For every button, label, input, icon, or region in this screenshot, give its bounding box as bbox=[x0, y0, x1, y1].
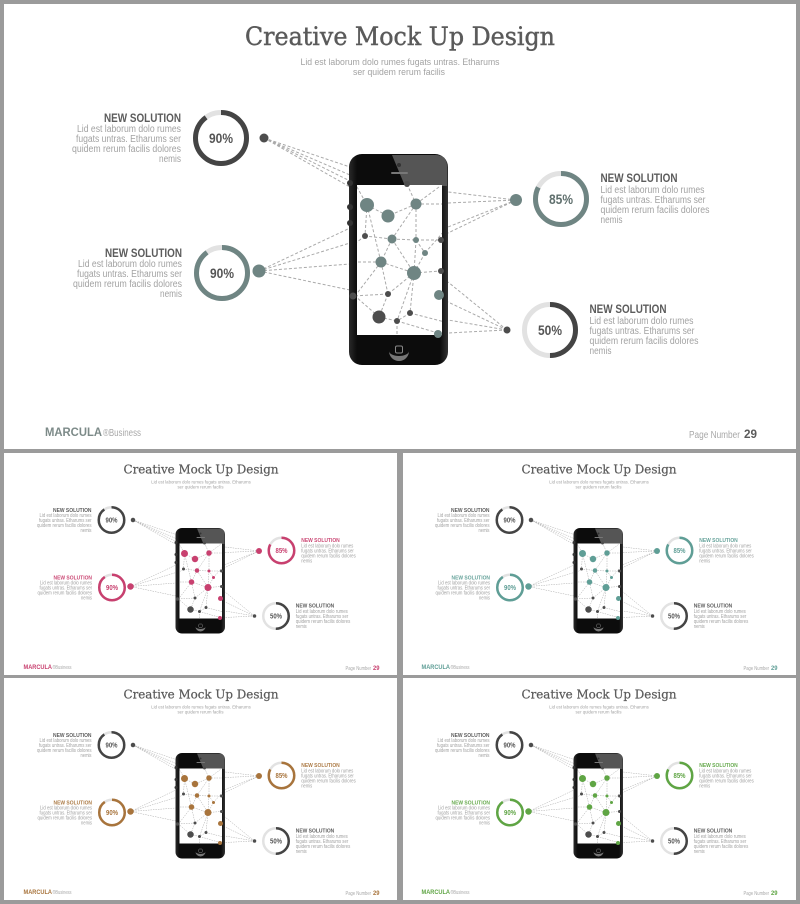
callout: lower right: nemis bbox=[296, 624, 307, 630]
nodes: network bbox=[174, 766, 223, 845]
panel: main slide bbox=[45, 22, 757, 441]
callout: lower left: NEW SOLUTION bbox=[452, 576, 490, 582]
panel: brown slide bbox=[24, 686, 380, 897]
callout: lower right: NEW SOLUTION bbox=[296, 604, 334, 610]
callout: lower left: Lid est laborum dolo rumes bbox=[40, 580, 92, 586]
brand footer bbox=[24, 664, 72, 671]
callout: lower right: quidem rerum facilis dolores bbox=[694, 844, 749, 850]
callout: lower left: Lid est laborum dolo rumes bbox=[438, 806, 490, 812]
callout: top right: Lid est laborum dolo rumes bbox=[600, 185, 704, 196]
callout: lower left: nemis bbox=[160, 289, 182, 300]
callout: top left: Lid est laborum dolo rumes bbox=[438, 738, 490, 744]
callout: top left: NEW SOLUTION bbox=[451, 508, 490, 514]
brand footer: MARCULA bbox=[24, 665, 53, 671]
brand footer: MARCULA bbox=[24, 890, 53, 896]
callout: top left: 90% bbox=[106, 742, 118, 750]
title: Creative Mock Up Design bbox=[124, 462, 278, 476]
callout: top left: fugats untras. Etharums ser bbox=[437, 743, 490, 749]
callout: top right: quidem rerum facilis dolores bbox=[301, 554, 356, 560]
callout: top left bbox=[435, 507, 533, 534]
callout: lower right: quidem rerum facilis dolores bbox=[694, 619, 749, 625]
callout: top right: 85% bbox=[276, 548, 288, 555]
callout: lower right: fugats untras. Etharums ser bbox=[694, 839, 747, 845]
callout: top left: nemis bbox=[80, 753, 92, 759]
brand footer: ®Business bbox=[450, 889, 470, 896]
callout: top right: NEW SOLUTION bbox=[301, 763, 340, 769]
connector lines bbox=[528, 520, 657, 618]
page number: 29 bbox=[373, 666, 380, 672]
callout: lower right: quidem rerum facilis dolores bbox=[296, 619, 351, 625]
callout: top right: NEW SOLUTION bbox=[301, 538, 340, 544]
callout: lower right: quidem rerum facilis dolores bbox=[296, 844, 351, 850]
callout: top right: nemis bbox=[301, 784, 313, 790]
brand footer bbox=[24, 889, 72, 896]
callout: top left: Lid est laborum dolo rumes bbox=[438, 513, 490, 519]
callout: top left: Lid est laborum dolo rumes bbox=[40, 738, 92, 744]
page number: Page Number bbox=[689, 430, 741, 441]
callout: lower right bbox=[253, 603, 351, 630]
callout: lower right: 50% bbox=[668, 838, 681, 846]
callout: top left: fugats untras. Etharums ser bbox=[76, 134, 182, 145]
callout: lower right: 50% bbox=[270, 614, 283, 620]
callout: lower right: Lid est laborum dolo rumes bbox=[296, 834, 348, 840]
callout: top right: nemis bbox=[301, 558, 313, 564]
callout: lower right: fugats untras. Etharums ser bbox=[590, 326, 695, 337]
callout: top left bbox=[37, 732, 135, 759]
brand footer bbox=[422, 664, 470, 671]
callout: top left: Lid est laborum dolo rumes bbox=[40, 513, 92, 519]
callout: lower left bbox=[436, 575, 532, 602]
brand footer bbox=[422, 889, 470, 896]
page number: 29 bbox=[771, 666, 778, 672]
callout: top right: fugats untras. Etharums ser bbox=[301, 548, 354, 554]
callout: top left: 90% bbox=[209, 130, 233, 146]
callout: top right: NEW SOLUTION bbox=[699, 763, 738, 769]
subtitle bbox=[549, 704, 649, 716]
callout: top right bbox=[654, 763, 754, 790]
icon: phone bbox=[174, 528, 225, 634]
callout: lower left: quidem rerum facilis dolores bbox=[73, 279, 182, 290]
callout: top right: fugats untras. Etharums ser bbox=[699, 548, 752, 554]
callout: top right bbox=[256, 538, 356, 564]
callout: lower left bbox=[436, 800, 532, 826]
callout: lower left bbox=[38, 575, 134, 602]
callout: lower right: 50% bbox=[538, 322, 562, 338]
callout: lower right: NEW SOLUTION bbox=[694, 604, 732, 610]
callout: lower right bbox=[504, 304, 698, 357]
subtitle: ser quidem rerum facilis bbox=[178, 710, 224, 716]
callout: top left: fugats untras. Etharums ser bbox=[437, 518, 490, 524]
subtitle: Lid est laborum dolo rumes fugats untras. Etharums bbox=[151, 704, 251, 710]
panel: pink slide bbox=[24, 462, 380, 672]
callout: lower right: Lid est laborum dolo rumes bbox=[590, 316, 694, 327]
title: Creative Mock Up Design bbox=[124, 686, 278, 702]
callout: top left: nemis bbox=[159, 154, 181, 165]
callout: lower left: fugats untras. Etharums ser bbox=[40, 810, 92, 816]
callout: top right: fugats untras. Etharums ser bbox=[600, 195, 706, 206]
callout: lower left: fugats untras. Etharums ser bbox=[438, 586, 490, 592]
callout: lower right: Lid est laborum dolo rumes bbox=[296, 609, 348, 615]
connector lines bbox=[130, 745, 259, 842]
callout: top left bbox=[37, 507, 135, 534]
callout: top right: Lid est laborum dolo rumes bbox=[699, 544, 752, 550]
callout: top left: nemis bbox=[80, 528, 92, 534]
callout: lower left: nemis bbox=[81, 596, 92, 602]
page number: Page Number bbox=[744, 666, 769, 672]
subtitle bbox=[151, 480, 251, 490]
callout: top right: quidem rerum facilis dolores bbox=[699, 554, 754, 560]
connector lines bbox=[528, 745, 657, 842]
callout: lower left: 90% bbox=[106, 810, 119, 817]
subtitle: Lid est laborum dolo rumes fugats untras. Etharums bbox=[300, 57, 500, 68]
callout: top left: NEW SOLUTION bbox=[53, 508, 92, 514]
callout: top left: quidem rerum facilis dolores bbox=[37, 523, 92, 529]
callout: top left: quidem rerum facilis dolores bbox=[37, 748, 92, 754]
callout: top left: fugats untras. Etharums ser bbox=[39, 743, 92, 749]
callout: top right: nemis bbox=[699, 558, 711, 564]
callout: lower left: fugats untras. Etharums ser bbox=[77, 269, 183, 280]
brand footer: MARCULA bbox=[422, 665, 451, 671]
brand footer bbox=[45, 425, 141, 439]
callout: lower left bbox=[38, 800, 134, 826]
callout: top right bbox=[654, 538, 754, 564]
brand footer: MARCULA bbox=[422, 890, 451, 896]
callout: lower left: nemis bbox=[479, 820, 490, 826]
brand footer: ®Business bbox=[103, 428, 141, 439]
callout: top right: nemis bbox=[600, 215, 622, 226]
callout: lower right: nemis bbox=[694, 849, 705, 855]
brand footer: MARCULA bbox=[45, 425, 102, 439]
callout: top right: 85% bbox=[674, 773, 686, 780]
panel: teal slide bbox=[422, 462, 778, 672]
callout: top right: 85% bbox=[276, 773, 288, 780]
callout: top left: quidem rerum facilis dolores bbox=[435, 523, 490, 529]
subtitle: ser quidem rerum facilis bbox=[353, 67, 445, 78]
callout: top right: fugats untras. Etharums ser bbox=[699, 774, 752, 780]
callout: lower left: quidem rerum facilis dolores bbox=[38, 816, 92, 822]
brand footer: ®Business bbox=[52, 889, 72, 896]
callout: lower right: nemis bbox=[296, 849, 307, 855]
callout: lower left: 90% bbox=[210, 265, 234, 281]
callout: top right: 85% bbox=[549, 191, 573, 207]
callout: top right: 85% bbox=[674, 548, 686, 555]
callout: top left: nemis bbox=[478, 528, 490, 534]
nodes: network bbox=[572, 541, 621, 620]
callout: lower left: NEW SOLUTION bbox=[54, 800, 92, 806]
callout: top right: fugats untras. Etharums ser bbox=[301, 774, 354, 780]
callout: lower right: fugats untras. Etharums ser bbox=[694, 614, 747, 620]
callout: lower right: nemis bbox=[694, 624, 705, 630]
callout: top right: Lid est laborum dolo rumes bbox=[301, 768, 354, 774]
subtitle bbox=[151, 704, 251, 716]
callout: top left: NEW SOLUTION bbox=[53, 733, 92, 739]
callout: top left: NEW SOLUTION bbox=[104, 113, 181, 125]
subtitle bbox=[549, 480, 649, 490]
callout: lower right bbox=[651, 828, 749, 855]
callout: lower right: quidem rerum facilis dolores bbox=[590, 336, 698, 347]
callout: lower left: fugats untras. Etharums ser bbox=[438, 810, 490, 816]
callout: lower right: NEW SOLUTION bbox=[590, 304, 666, 316]
callout: top right: NEW SOLUTION bbox=[600, 173, 678, 185]
page number: 29 bbox=[744, 427, 757, 441]
callout: lower left: Lid est laborum dolo rumes bbox=[438, 580, 490, 586]
callout: lower left: quidem rerum facilis dolores bbox=[436, 590, 490, 596]
title: Creative Mock Up Design bbox=[522, 686, 676, 702]
nodes: network bbox=[174, 541, 223, 620]
callout: top right bbox=[510, 173, 710, 226]
callout: lower left: quidem rerum facilis dolores bbox=[38, 590, 92, 596]
callout: top right: quidem rerum facilis dolores bbox=[699, 778, 754, 784]
callout: lower left: NEW SOLUTION bbox=[105, 248, 182, 260]
callout: lower right: NEW SOLUTION bbox=[296, 828, 334, 834]
icon: phone bbox=[347, 154, 448, 365]
callout: top left: fugats untras. Etharums ser bbox=[39, 518, 92, 524]
callout: top right: nemis bbox=[699, 784, 711, 790]
page number: 29 bbox=[373, 891, 380, 897]
callout: lower left bbox=[73, 248, 266, 300]
callout: top right bbox=[256, 763, 356, 790]
callout: top left bbox=[435, 732, 533, 759]
callout: top left: quidem rerum facilis dolores bbox=[435, 748, 490, 754]
callout: lower left: Lid est laborum dolo rumes bbox=[78, 259, 182, 270]
callout: top right: Lid est laborum dolo rumes bbox=[301, 544, 354, 550]
brand footer: ®Business bbox=[52, 664, 72, 671]
callout: lower right bbox=[651, 603, 749, 630]
page number: 29 bbox=[771, 891, 778, 897]
nodes: network bbox=[572, 766, 621, 845]
callout: lower left: Lid est laborum dolo rumes bbox=[40, 806, 92, 812]
subtitle: ser quidem rerum facilis bbox=[576, 710, 622, 716]
callout: lower left: 90% bbox=[106, 585, 119, 592]
callout: lower left: nemis bbox=[479, 596, 490, 602]
callout: top right: NEW SOLUTION bbox=[699, 538, 738, 544]
connector lines bbox=[130, 520, 259, 618]
nodes: network bbox=[347, 180, 444, 338]
callout: top right: quidem rerum facilis dolores bbox=[301, 778, 356, 784]
connector lines bbox=[259, 138, 516, 333]
callout: lower right: Lid est laborum dolo rumes bbox=[694, 834, 746, 840]
callout: lower right: 50% bbox=[668, 614, 681, 620]
callout: top left bbox=[72, 112, 268, 165]
callout: lower right: nemis bbox=[590, 346, 612, 357]
callout: top left: nemis bbox=[478, 753, 490, 759]
callout: lower right: fugats untras. Etharums ser bbox=[296, 839, 349, 845]
subtitle: ser quidem rerum facilis bbox=[576, 484, 622, 490]
callout: lower right bbox=[253, 828, 351, 855]
callout: lower left: fugats untras. Etharums ser bbox=[40, 586, 92, 592]
callout: top left: NEW SOLUTION bbox=[451, 733, 490, 739]
callout: lower left: NEW SOLUTION bbox=[452, 800, 490, 806]
subtitle: ser quidem rerum facilis bbox=[178, 484, 224, 490]
panel: green slide bbox=[422, 686, 778, 897]
icon: phone bbox=[174, 753, 225, 858]
title: Creative Mock Up Design bbox=[522, 462, 676, 476]
subtitle: Lid est laborum dolo rumes fugats untras. Etharums bbox=[549, 704, 649, 710]
icon: phone bbox=[572, 528, 623, 634]
callout: lower right: fugats untras. Etharums ser bbox=[296, 614, 349, 620]
title: Creative Mock Up Design bbox=[245, 22, 555, 51]
subtitle bbox=[300, 57, 500, 78]
callout: top right: quidem rerum facilis dolores bbox=[600, 205, 710, 216]
callout: lower left: nemis bbox=[81, 820, 92, 826]
callout: lower right: 50% bbox=[270, 838, 283, 846]
callout: top left: quidem rerum facilis dolores bbox=[72, 144, 181, 155]
callout: top left: 90% bbox=[106, 518, 118, 524]
callout: lower left: 90% bbox=[504, 810, 517, 817]
callout: top left: Lid est laborum dolo rumes bbox=[77, 124, 181, 135]
page number: Page Number bbox=[346, 891, 371, 897]
icon: phone bbox=[572, 753, 623, 858]
callout: lower right: NEW SOLUTION bbox=[694, 828, 732, 834]
callout: lower left: quidem rerum facilis dolores bbox=[436, 816, 490, 822]
subtitle: Lid est laborum dolo rumes fugats untras. Etharums bbox=[151, 480, 251, 486]
callout: top left: 90% bbox=[504, 518, 516, 524]
callout: lower left: 90% bbox=[504, 585, 517, 592]
subtitle: Lid est laborum dolo rumes fugats untras. Etharums bbox=[549, 480, 649, 486]
callout: lower left: NEW SOLUTION bbox=[54, 576, 92, 582]
callout: lower right: Lid est laborum dolo rumes bbox=[694, 609, 746, 615]
callout: top left: 90% bbox=[504, 742, 516, 750]
page number: Page Number bbox=[346, 666, 371, 672]
brand footer: ®Business bbox=[450, 664, 470, 671]
callout: top right: Lid est laborum dolo rumes bbox=[699, 768, 752, 774]
page number: Page Number bbox=[744, 891, 769, 897]
